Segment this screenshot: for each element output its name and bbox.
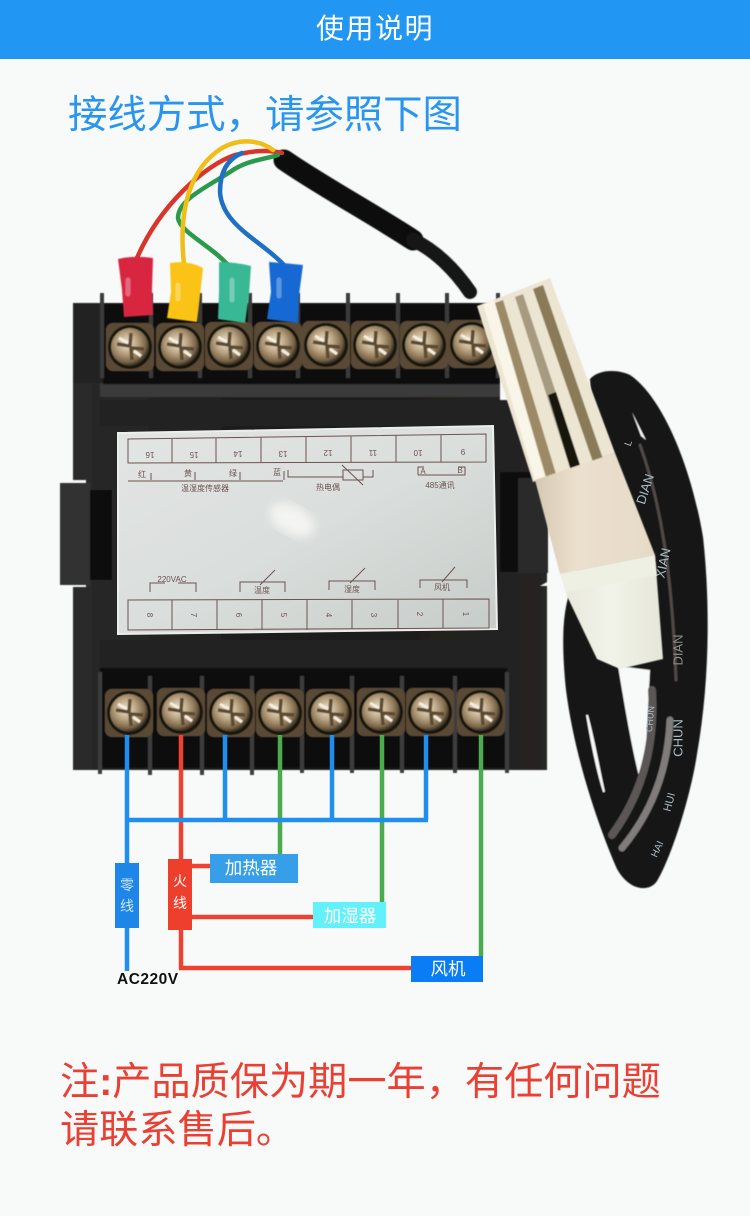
terminal label sticker: 7 xyxy=(189,613,198,618)
terminal label sticker: 温度 xyxy=(254,585,270,595)
neutral label box: 线 xyxy=(120,898,134,914)
terminal label sticker: 红 xyxy=(138,469,146,479)
terminal label sticker: 10 xyxy=(413,448,422,457)
terminal label sticker: 湿度 xyxy=(344,584,360,594)
fan label: 风机 xyxy=(430,959,466,979)
terminal label sticker: 8 xyxy=(145,613,154,618)
neutral label box: 零 xyxy=(120,877,134,893)
cable print text: XIAN xyxy=(653,547,674,579)
header bar: 使用说明 xyxy=(316,13,434,44)
sensor cable: black sleeve xyxy=(284,160,470,292)
temperature humidity sensor probe xyxy=(477,278,663,669)
warranty note: 请联系售后。 xyxy=(60,1109,295,1152)
terminal label sticker: 220VAC xyxy=(157,575,187,584)
cable print text: HUI xyxy=(662,792,678,813)
top terminal strip xyxy=(102,293,499,384)
terminal label sticker: 1 xyxy=(461,612,470,617)
live label box: 线 xyxy=(173,895,187,911)
cable print text: HAI xyxy=(649,840,666,859)
cable print text: CHUN xyxy=(644,706,656,732)
sensor wires xyxy=(137,141,283,264)
cable print text: L xyxy=(623,438,635,448)
warranty note: 注:产品质保为期一年，有任何问题 xyxy=(60,1061,661,1104)
cable print text: DIAN xyxy=(671,634,686,666)
terminal label sticker: 6 xyxy=(234,613,243,618)
fan label xyxy=(411,956,483,982)
cable print text xyxy=(623,438,686,859)
terminal label sticker: 14 xyxy=(233,449,242,458)
cable print text: CHUN xyxy=(671,719,686,757)
live label box: 火 xyxy=(173,873,187,889)
terminal label sticker: 黄 xyxy=(184,468,192,478)
terminal label sticker xyxy=(118,426,497,634)
heater label: 加热器 xyxy=(225,858,277,878)
bottom terminal strip xyxy=(100,668,507,775)
terminal label sticker: 15 xyxy=(189,450,198,459)
terminal label sticker: 9 xyxy=(460,447,465,456)
terminal label sticker: B xyxy=(457,466,463,475)
terminal label sticker: A xyxy=(420,467,426,476)
terminal label sticker: 11 xyxy=(368,448,377,457)
terminal label sticker: 蓝 xyxy=(273,467,281,477)
heading: wiring instruction: 接线方式，请参照下图 xyxy=(68,93,462,137)
warranty note xyxy=(60,1061,661,1152)
wiring: neutral line blue xyxy=(127,735,428,971)
cable print text: DIAN xyxy=(633,472,657,506)
humidifier label: 加湿器 xyxy=(324,906,376,926)
humidifier label xyxy=(313,902,386,928)
sensor loop cable xyxy=(563,371,708,888)
live label box xyxy=(168,859,192,930)
terminal label sticker: 4 xyxy=(324,613,333,618)
terminal label sticker: 风机 xyxy=(434,582,450,592)
terminal label sticker: 13 xyxy=(278,449,287,458)
terminal label sticker: 12 xyxy=(323,448,332,457)
crimp terminals xyxy=(118,257,303,323)
terminal label sticker: 绿 xyxy=(229,469,237,478)
terminal label sticker: 温湿度传感器 xyxy=(181,483,229,493)
terminal label sticker: 16 xyxy=(145,450,154,459)
terminal label sticker: 3 xyxy=(369,613,378,618)
controller body xyxy=(60,303,548,770)
terminal label sticker: 热电偶 xyxy=(316,482,340,492)
terminal label sticker: 5 xyxy=(279,613,288,618)
neutral label box xyxy=(115,863,139,928)
AC220V label: AC220V xyxy=(117,971,179,988)
header bar xyxy=(0,0,750,59)
terminal label sticker: 2 xyxy=(415,612,424,617)
wiring: load lines green xyxy=(280,735,481,956)
wiring: live line red xyxy=(181,735,411,968)
heater label xyxy=(210,854,298,883)
terminal label sticker: 485通讯 xyxy=(425,480,455,490)
